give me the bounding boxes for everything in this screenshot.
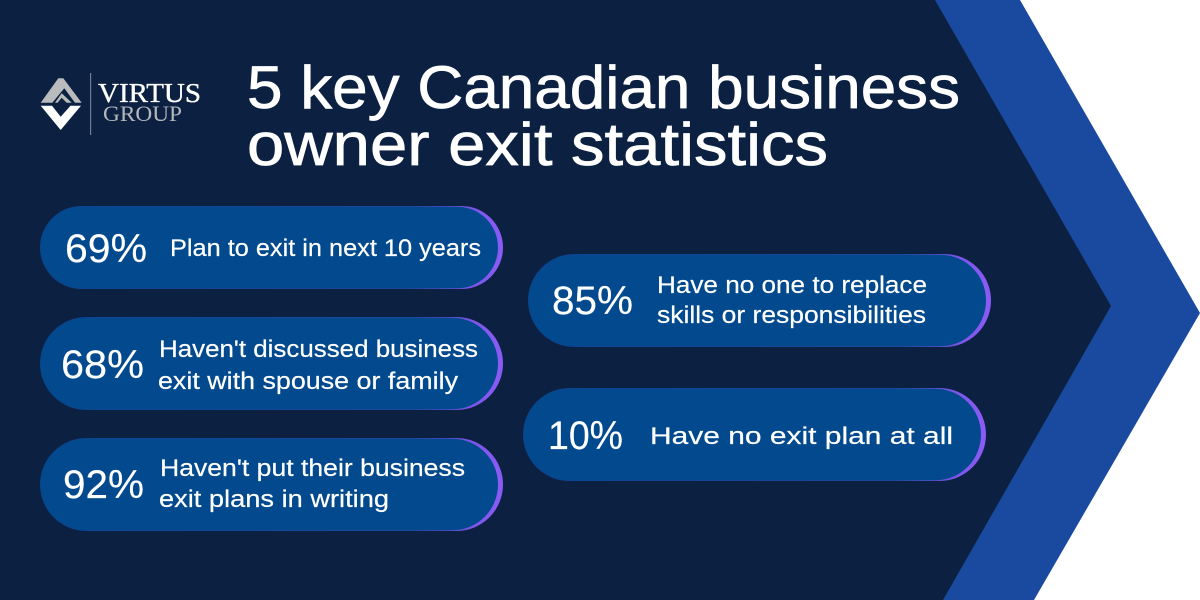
stat pill: 69% <box>40 206 503 289</box>
stat pill: 85%: Have no one to replace <box>657 272 927 299</box>
stat pill: 85%: 85% <box>552 279 633 323</box>
stat pill: 92%: exit plans in writing <box>159 486 389 513</box>
stat pill: 10% <box>523 388 986 481</box>
stat pill: 85% <box>528 254 991 347</box>
stat pill: 68%: exit with spouse or family <box>158 368 458 395</box>
icon: diamond top <box>41 78 82 103</box>
stat pill: 92% <box>40 438 503 531</box>
logo divider <box>90 73 91 135</box>
stat pill: 69%: 69% <box>65 227 147 271</box>
stat pill: 69%: Plan to exit in next 10 years <box>170 235 481 262</box>
stat pill: 68% <box>40 317 503 410</box>
stat pill: 10%: Have no exit plan at all <box>650 423 953 450</box>
logo word: VIRTUS: VIRTUS <box>98 78 201 108</box>
stat pill: 68%: Haven't discussed business <box>159 336 478 363</box>
stat pill: 68%: 68% <box>61 343 144 387</box>
logo: Virtus Group <box>41 73 201 135</box>
stat pill: 10%: 10% <box>548 414 623 458</box>
title: owner exit statistics <box>247 111 828 178</box>
title: 5 key Canadian business <box>247 54 960 121</box>
stat pill: 92%: 92% <box>63 463 144 507</box>
stat pill: 85%: skills or responsibilities <box>657 302 926 329</box>
title <box>247 54 960 178</box>
icon: diamond bottom V <box>41 106 81 130</box>
icon: diamond inner mark <box>55 93 72 103</box>
stat pill: 92%: Haven't put their business <box>160 455 465 482</box>
logo word: GROUP: GROUP <box>103 101 182 126</box>
